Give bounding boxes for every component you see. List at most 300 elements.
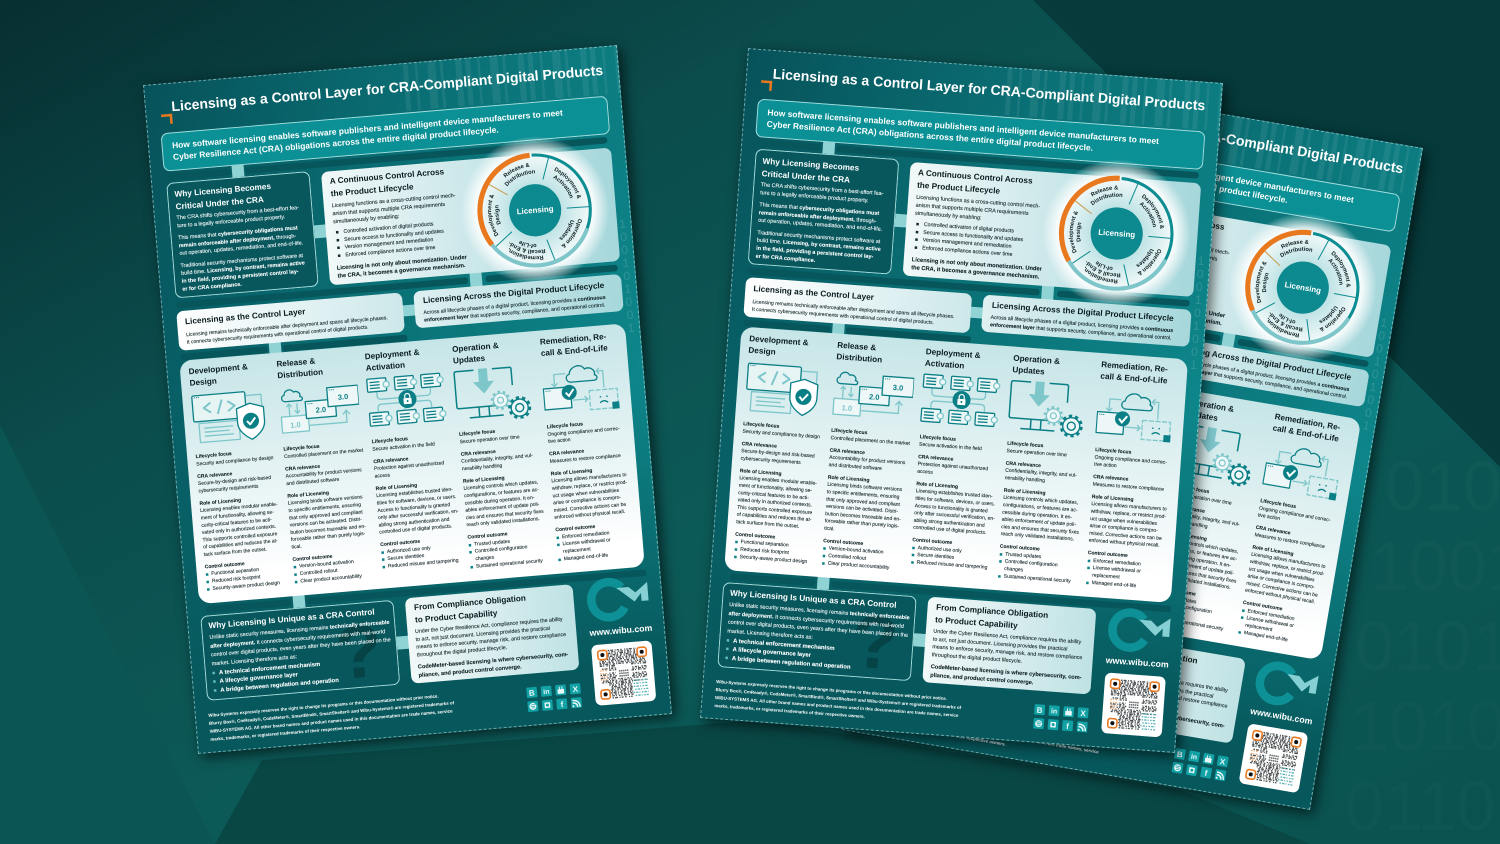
text: operation details: ables enforcement of update poli- bbox=[1002, 517, 1076, 528]
poster: front center: 1 bbox=[1190, 358, 1197, 372]
text: release details: Controlled rollout bbox=[828, 553, 866, 561]
text: deployment details: controlled use of digital products. bbox=[913, 525, 986, 536]
heading: remediation: Remediation, Re- bbox=[1101, 360, 1168, 374]
text: release details: forceable rather than purely logis- bbox=[824, 518, 899, 529]
heading: control layer: Licensing as the Control Layer bbox=[753, 284, 874, 302]
chart: lifecycle ring: Activation bbox=[1328, 259, 1342, 285]
text: deployment details: Authorized use only bbox=[387, 545, 431, 554]
heading: licensing across lifecycle: Licensing Across the Digital Product Lifecycle bbox=[992, 301, 1174, 323]
text: continuous control: anism that supports multiple CRA requirements bbox=[915, 202, 1029, 216]
heading: remediation: Remediation, Re- bbox=[540, 332, 607, 347]
text: deployment details: Control outcome bbox=[380, 539, 420, 548]
heading: control layer: Licensing as the Control Layer bbox=[185, 307, 306, 326]
corner accent bbox=[761, 80, 772, 91]
text: licensing across lifecycle: enforcement layer that supports security, compliance, and operational control. bbox=[1168, 364, 1348, 400]
text: deployment details: access bbox=[917, 469, 933, 475]
text: deployment details: access bbox=[374, 472, 390, 479]
text: closing statement bbox=[337, 253, 468, 280]
subtitle banner: How software licensing enables software publishers and intelligent device manufacturers to meet bbox=[767, 108, 1159, 146]
text: closing statement: Licensing is not only about monetization. Under bbox=[337, 254, 467, 271]
text: continuous control: Licensing functions as a cross-cutting control mech- bbox=[332, 192, 456, 209]
text: continuous control: anism that supports multiple CRA requirements bbox=[332, 201, 445, 217]
poster: front left: 0 bbox=[626, 308, 634, 322]
text: remediation details bbox=[547, 417, 642, 569]
text: deployment details: abling strong authentication and bbox=[914, 517, 985, 528]
text: operation details: Sustained operational security bbox=[1157, 615, 1224, 632]
chart: lifecycle ring: Remediation, bbox=[1084, 266, 1118, 284]
text: licensing across lifecycle: Across all lifecycle phases of a digital product, licensing provides a continuous bbox=[423, 295, 606, 316]
qr code bbox=[1239, 723, 1308, 793]
heading: compliance to capability bbox=[935, 601, 1049, 634]
social media icons: X bbox=[1219, 757, 1227, 767]
heading: why unique: Why Licensing Is Unique as a CRA Control bbox=[208, 607, 375, 630]
text: operation details: changes bbox=[1004, 566, 1023, 573]
heading: why critical bbox=[761, 157, 859, 184]
subtitle banner: How software licensing enables software publishers and intelligent device manufacturers to meet bbox=[967, 129, 1355, 205]
poster: front left: 0 bbox=[620, 230, 627, 244]
text: remediation details: Lifecycle focus bbox=[1260, 498, 1296, 510]
chart: lifecycle ring: Licensing bbox=[1098, 228, 1136, 239]
text: release details: Version-bound activation bbox=[299, 559, 354, 569]
text: compliance to capability: means to enforce security, manage risk, and restore compliance bbox=[1079, 678, 1228, 710]
text: release details: Clear product accountability bbox=[828, 560, 890, 570]
text: operation details: cies and ensures that security fixes bbox=[466, 509, 544, 521]
heading: continuous control: A Continuous Control Across bbox=[918, 168, 1033, 186]
icon: monitor with update arrow and gears bbox=[1195, 426, 1250, 486]
text: why critical: ture to a legally enforceable product property. bbox=[177, 214, 285, 229]
subtitle banner: Cyber Resilience Act (CRA) obligations across the entire digital product lifecycle. bbox=[173, 125, 499, 162]
text: release details: that only approved and compliant bbox=[826, 496, 900, 507]
chart: lifecycle ring: Licensing bbox=[516, 204, 554, 216]
text: release details: and distributed software bbox=[286, 477, 340, 487]
heading: development bbox=[188, 361, 249, 389]
text: remediation details: mised. Corrective actions can be bbox=[1246, 580, 1318, 598]
chart: lifecycle ring: of-Life bbox=[519, 240, 536, 248]
text: release details: tical. bbox=[824, 526, 835, 532]
social media icons: X bbox=[1080, 709, 1087, 718]
text: deployment details: Role of Licensing bbox=[916, 481, 958, 490]
text: release details: Accountability for product versions bbox=[285, 467, 362, 479]
text: continuous control: Licensing functions as a cross-cutting control mech- bbox=[1107, 229, 1230, 256]
text: remediation details bbox=[1085, 447, 1179, 598]
text: release details: Role of Licensing bbox=[287, 490, 329, 499]
icon: monitor with update arrow and gears bbox=[1007, 377, 1091, 438]
text: release details: bution becomes traceable and en- bbox=[825, 511, 901, 522]
text: operation details: nerability handling bbox=[1005, 475, 1045, 483]
text: continuous control: simultaneously by enabling: bbox=[1104, 245, 1171, 262]
text: development details: Security and compliance by design bbox=[742, 428, 820, 440]
poster: front left: 0 bbox=[625, 295, 633, 309]
social media icons: B bbox=[1176, 750, 1184, 760]
text: remediation details: License withdrawal or bbox=[1246, 615, 1294, 629]
chart: lifecycle ring: Recall & End- bbox=[509, 242, 546, 254]
chart: lifecycle ring: of-Life bbox=[1096, 261, 1113, 270]
text: remediation details: arise or compliance is compro- bbox=[1090, 523, 1158, 534]
text: why critical: ture to a legally enforceable product property. bbox=[760, 190, 869, 203]
text: operation details: reach only validated installations. bbox=[1000, 531, 1074, 542]
heading: operation: Updates bbox=[1012, 365, 1045, 376]
icon: versioned windows with cloud: 1.0 bbox=[841, 403, 852, 413]
subtitle banner: Cyber Resilience Act (CRA) obligations across the entire digital product lifecycle. bbox=[965, 141, 1288, 205]
text: development details: tack surface from the outset. bbox=[203, 547, 267, 557]
heading: release bbox=[836, 341, 882, 364]
chart: lifecycle ring bbox=[1046, 160, 1189, 306]
heading: operation: Operation & bbox=[1013, 354, 1060, 366]
chart: lifecycle ring: Recall & End- bbox=[1269, 312, 1302, 332]
text: operation details: Lifecycle focus bbox=[459, 429, 495, 437]
chart: lifecycle ring: Updates bbox=[1136, 249, 1154, 267]
footer legal text: Wibu-Systems expressly reserves the right to change its programs or this documentation without prior notice. bbox=[861, 693, 1089, 737]
text: remediation details: Control outcome bbox=[1088, 550, 1128, 559]
text: operation details: Secure operation over time bbox=[459, 434, 520, 445]
social media icons: X bbox=[572, 685, 579, 694]
heading: compliance to capability: to Product Capability bbox=[415, 608, 498, 624]
text: remediation details: Ongoing compliance and correc- bbox=[1259, 505, 1331, 523]
text: remediation details: Enforced remediation bbox=[562, 530, 610, 540]
text: release details: CRA relevance bbox=[285, 463, 320, 472]
footer legal text: WIBU-SYSTEMS AG. All other brand names and product names used in this documentation are trade names, service bbox=[859, 709, 1099, 754]
text: remediation details: Licensing allows manufacturers to bbox=[1251, 552, 1326, 570]
text: deployment details: Secure activation in the field bbox=[919, 441, 982, 452]
social media icons: in bbox=[1190, 754, 1198, 762]
text: compliance to capability: Under the Cyber Resilience Act, compliance requires the ability bbox=[1082, 663, 1228, 694]
text: operation details: configurations, or features are ac- bbox=[1163, 544, 1237, 562]
social media icons bbox=[1033, 704, 1090, 733]
heading: development: Design bbox=[748, 345, 776, 356]
text: deployment details: tities for software, devices, or users. bbox=[377, 494, 457, 506]
chart: lifecycle ring: Release & bbox=[1090, 186, 1118, 196]
icon: question mark watermark: ? bbox=[849, 598, 901, 686]
heading: remediation: call & End-of-Life bbox=[1272, 423, 1340, 443]
text: release details: Controlled placement on the market bbox=[284, 447, 363, 459]
text: remediation details: Control outcome bbox=[1243, 600, 1283, 612]
footer legal text: WIBU-SYSTEMS AG. All other brand names and product names used in this documentation are trade names, service bbox=[715, 695, 959, 718]
text: development details: tack surface from the outset. bbox=[736, 519, 799, 529]
heading: release: Distribution bbox=[277, 367, 323, 380]
text: why critical: Traditional security mechanisms protect software at bbox=[757, 229, 880, 244]
chart: lifecycle ring: Remediation, bbox=[1268, 318, 1299, 338]
text: codemeter statement: CodeMeter-based licensing is where cybersecurity, com- bbox=[418, 651, 569, 670]
poster: front center: 1 bbox=[1197, 254, 1205, 268]
text: compliance to capability: throughout the digital product lifecycle. bbox=[417, 645, 507, 658]
heading: why critical: Why Licensing Becomes bbox=[174, 182, 271, 199]
heading: development bbox=[748, 334, 809, 356]
list: enabled controls: Secure access to functionality and updates bbox=[923, 229, 1023, 243]
text: deployment details: Control outcome bbox=[912, 537, 952, 546]
heading: operation: Updates bbox=[453, 354, 485, 365]
text: why critical: remain enforceable after deployment, through- bbox=[179, 233, 296, 249]
chart: lifecycle ring: Design bbox=[494, 205, 501, 225]
text: operation details: Controlled configuration bbox=[1005, 559, 1058, 568]
text: why unique bbox=[727, 601, 910, 649]
text: operation details: Controlled configuration bbox=[475, 544, 528, 554]
text: development details: Security-aware product design bbox=[740, 554, 807, 564]
heading: why critical: Critical Under the CRA bbox=[175, 195, 264, 211]
text: development details: Secure-by-design and risk-based bbox=[741, 448, 815, 459]
text: remediation details: replacement bbox=[1245, 623, 1273, 633]
poster: back right: 0 bbox=[1371, 367, 1379, 382]
footer legal text: marks, trademarks, or registered trademarks of their respective owners. bbox=[210, 724, 361, 742]
text: development details: cybersecurity requirements bbox=[741, 456, 801, 465]
text: operation details: Role of Licensing bbox=[1165, 530, 1207, 542]
text: remediation details: Control outcome bbox=[555, 524, 596, 533]
text: remediation details: replacement bbox=[563, 546, 591, 554]
chart: lifecycle ring: Operation & bbox=[1137, 249, 1162, 276]
chart: lifecycle ring: Release & bbox=[1280, 240, 1308, 249]
text: operation details: configurations, or features are ac- bbox=[1003, 502, 1078, 513]
text: remediation details: CRA relevance bbox=[1255, 525, 1291, 536]
poster: front left: 1 bbox=[619, 217, 626, 231]
column: deployment and activation bbox=[909, 345, 1010, 586]
text: release details bbox=[821, 427, 915, 578]
text: deployment details: CRA relevance bbox=[918, 454, 954, 462]
text: operation details: Licensing controls which updates, bbox=[1164, 537, 1239, 555]
text: remediation details: CRA relevance bbox=[549, 449, 584, 457]
poster: front left: 1 bbox=[627, 321, 635, 335]
qr code bbox=[1101, 672, 1166, 737]
panel: why licensing becomes critical bbox=[166, 171, 319, 298]
text: release details: Control outcome bbox=[823, 538, 863, 546]
text: deployment details: Secure identities bbox=[917, 552, 954, 561]
poster: front left: 1 bbox=[622, 256, 630, 270]
text: release details: to specific entitlements, ensuring bbox=[288, 502, 361, 514]
panel: licensing across lifecycle bbox=[981, 295, 1192, 347]
text: why critical: out operation, updates, remediation, and end-of-life. bbox=[179, 240, 303, 257]
text: compliance to capability: throughout the digital product lifecycle. bbox=[932, 652, 1022, 664]
text: remediation details: enforced without physical recall. bbox=[1245, 588, 1315, 605]
list: enabled controls: Version management and remediation bbox=[923, 237, 1012, 250]
text: why critical: remain enforceable after deployment, through- bbox=[759, 209, 877, 224]
panel: compliance to capability bbox=[1066, 631, 1246, 744]
list: licensing roles: A lifecycle governance layer bbox=[219, 671, 298, 684]
text: operation details: Trusted updates bbox=[1005, 551, 1041, 560]
text: why unique: after deployment. It connects cybersecurity requirements with real-world bbox=[728, 610, 904, 629]
heading: continuous control: the Product Lifecycle bbox=[1109, 216, 1192, 239]
column: development and design bbox=[188, 358, 291, 600]
text: operation details: reach only validated installations. bbox=[466, 516, 540, 528]
column: release and distribution bbox=[822, 341, 914, 570]
text: deployment details: Reduced misuse and tampering bbox=[917, 560, 988, 570]
text: release details: versions can be activated. Distri- bbox=[826, 504, 898, 514]
text: why unique bbox=[209, 618, 392, 668]
text: development details: Reduced risk footprint bbox=[212, 574, 261, 584]
text: why unique: market. Licensing therefore acts as: bbox=[211, 653, 297, 667]
text: remediation details: tive action bbox=[1257, 512, 1281, 522]
text: compliance to capability bbox=[1078, 663, 1228, 710]
text: closing statement: Licensing is not only about monetization. Under bbox=[1096, 291, 1226, 319]
list: enabled controls: Secure access to functionality and updates bbox=[344, 228, 444, 242]
icon: question mark watermark: ? bbox=[333, 608, 386, 695]
text: remediation details: License withdrawal or bbox=[1093, 565, 1141, 574]
qr code bbox=[591, 640, 656, 706]
text: deployment details: Access to functionality is granted bbox=[915, 503, 988, 514]
text: operation details: Trusted updates bbox=[1160, 593, 1197, 605]
icon: cloud, windows and arrows bbox=[1262, 448, 1338, 501]
text: control layer: Licensing remains technically enforceable after deployment and spans all lifecycle phases. bbox=[186, 315, 388, 338]
text: codemeter statement bbox=[418, 650, 569, 680]
chart: lifecycle ring: Distribution bbox=[1280, 246, 1312, 258]
heading: continuous control: A Continuous Control Across bbox=[329, 167, 444, 186]
text: remediation details bbox=[1238, 498, 1331, 643]
panel: compliance to capability bbox=[405, 584, 579, 684]
text: development details: This supports controlled exposure bbox=[737, 504, 812, 516]
social media icons: f bbox=[1204, 769, 1208, 778]
text: closing statement: Licensing is not only about monetization. Under bbox=[912, 257, 1042, 272]
logo: CM mark bbox=[1256, 662, 1319, 706]
text: release details: tical. bbox=[291, 544, 302, 550]
footer legal text: marks, trademarks, or registered trademarks of their respective owners. bbox=[857, 716, 1006, 747]
column: operation and updates bbox=[1156, 397, 1250, 632]
text: operation details: nerability handling bbox=[1167, 517, 1208, 529]
text: licensing across lifecycle: enforcement layer that supports security, compliance, and operational control. bbox=[990, 322, 1172, 341]
panel: continuous control bbox=[1086, 197, 1392, 358]
text: why unique: Unlike static security measures, licensing remains technically enforceable bbox=[729, 602, 910, 621]
heading: remediation: call & End-of-Life bbox=[540, 343, 608, 358]
text: development details: curity-critical features to be acti- bbox=[201, 517, 272, 528]
social media icons: f bbox=[1066, 722, 1070, 731]
social media icons bbox=[1172, 748, 1229, 781]
heading: compliance to capability: From Compliance Obligation bbox=[414, 594, 526, 612]
panel: lifecycle phases bbox=[880, 344, 1361, 660]
heading: development: Development & bbox=[749, 334, 809, 347]
chart: lifecycle ring: Remediation, bbox=[508, 248, 544, 260]
text: operation details: Licensing controls which updates, bbox=[463, 480, 538, 491]
chart: lifecycle ring: Development & bbox=[1254, 262, 1267, 304]
text: remediation details: arise or compliance is compro- bbox=[1247, 573, 1315, 590]
column: development and design bbox=[734, 334, 820, 564]
list: licensing roles: A lifecycle governance layer bbox=[732, 646, 811, 658]
heading: development: Design bbox=[189, 376, 217, 387]
text: closing statement: the CRA, it becomes a governance mechanism. bbox=[1095, 299, 1222, 327]
text: remediation details: Enforced remediation bbox=[1093, 558, 1141, 567]
social media icons bbox=[526, 683, 583, 713]
text: release details: that only approved and compliant bbox=[289, 509, 363, 521]
heading: compliance to capability: From Compliance Obligation bbox=[1086, 638, 1198, 666]
text: control layer: Licensing remains technically enforceable after deployment and spans all lifecycle phases. bbox=[752, 299, 955, 320]
text: why critical bbox=[176, 204, 307, 298]
text: development details: of capabilities and reduces the at- bbox=[736, 512, 812, 523]
poster: front center: 1 bbox=[1193, 319, 1200, 333]
chart: lifecycle ring: Design bbox=[1262, 273, 1269, 292]
text: remediation details: Managed end-of-life bbox=[564, 552, 608, 562]
title: Licensing as a Control Layer for CRA-Compliant Digital Products bbox=[976, 88, 1405, 176]
footer legal text: marks, trademarks, or registered trademarks of their respective owners. bbox=[714, 703, 865, 719]
text: operation details: cessible during operation. It en- bbox=[1002, 509, 1072, 520]
list: enabled controls: Enforced compliance actions over time bbox=[922, 245, 1013, 258]
icon: code window with shield bbox=[746, 362, 818, 416]
icon: versioned windows with cloud: 3.0 bbox=[893, 383, 904, 393]
text: development details: Reduced risk footprint bbox=[740, 547, 789, 556]
heading: continuous control bbox=[329, 166, 446, 200]
text: development details: curity-critical features to be acti- bbox=[738, 490, 809, 501]
heading: remediation: call & End-of-Life bbox=[1100, 371, 1168, 385]
text: why critical: The CRA shifts cybersecurity from a best-effort fea- bbox=[176, 205, 299, 221]
text: compliance to capability: means to enforce security, manage risk, and restore compliance bbox=[932, 644, 1083, 661]
poster: front left: 0 bbox=[623, 269, 631, 283]
icon: versioned windows with cloud bbox=[277, 377, 361, 439]
chart: lifecycle ring: Operation & bbox=[561, 219, 582, 248]
text: operation details: Confidentiality, integrity, and vul- bbox=[1005, 468, 1077, 478]
text: operation details: CRA relevance bbox=[1170, 503, 1205, 514]
list: enabled controls bbox=[336, 220, 445, 260]
text: operation details bbox=[1156, 483, 1240, 632]
footer legal text: Wibu-Systems expressly reserves the right to change its programs or this documentation without prior notice. bbox=[208, 693, 439, 718]
text: development details: vated only in authorized contexts. bbox=[202, 524, 276, 536]
corner accent bbox=[161, 114, 173, 125]
text: operation details: ables enforcement of update poli- bbox=[465, 502, 540, 513]
text: control layer: It connects cybersecurity requirements with operational control of digital products. bbox=[187, 324, 369, 345]
poster: back right: 0 bbox=[1364, 406, 1373, 420]
text: deployment details: Lifecycle focus bbox=[919, 434, 956, 442]
heading: development: Development & bbox=[188, 362, 248, 376]
website url: www.wibu.com bbox=[1250, 706, 1313, 726]
text: deployment details: Access to functionality is granted bbox=[377, 502, 450, 513]
text: release details: to specific entitlements, ensuring bbox=[827, 489, 900, 500]
text: development details: Security-aware product design bbox=[212, 580, 280, 591]
poster: front center: 0 bbox=[1193, 306, 1201, 320]
text: remediation details: withdraw, replace, or restrict prod- bbox=[1091, 509, 1166, 520]
text: why unique: market. Licensing therefore acts as: bbox=[727, 628, 813, 640]
text: why critical: This means that cybersecurity obligations must bbox=[178, 225, 298, 241]
text: continuous control: anism that supports multiple CRA requirements bbox=[1106, 237, 1218, 262]
heading: compliance to capability: to Product Capability bbox=[935, 615, 1018, 630]
heading: licensing across lifecycle: Licensing Across the Digital Product Lifecycle bbox=[1171, 343, 1352, 382]
poster: front center: 1 bbox=[1194, 293, 1202, 307]
text: development details: CRA relevance bbox=[197, 471, 233, 479]
text: control layer: It connects cybersecurity requirements with operational control of digital products. bbox=[752, 307, 934, 326]
text: deployment details: Role of Licensing bbox=[375, 483, 417, 492]
text: why unique: control over digital products, even years after they have been placed on the bbox=[211, 637, 391, 658]
text: codemeter statement: pliance, and product control converge. bbox=[418, 664, 522, 678]
text: operation details: Secure operation over time bbox=[1006, 448, 1067, 458]
poster: front center: 0 bbox=[1192, 332, 1199, 346]
text: operation details: Control outcome bbox=[1000, 544, 1040, 552]
heading: remediation bbox=[1100, 359, 1169, 386]
text: closing statement: the CRA, it becomes a governance mechanism. bbox=[337, 262, 466, 279]
social media icons: B bbox=[1036, 706, 1043, 715]
text: continuous control: Licensing functions as a cross-cutting control mech- bbox=[916, 194, 1040, 209]
text: release details: Lifecycle focus bbox=[283, 444, 320, 452]
website url: www.wibu.com bbox=[1105, 655, 1169, 670]
text: why critical: Traditional security mechanisms protect software at bbox=[180, 252, 303, 269]
text: remediation details: Lifecycle focus bbox=[1095, 447, 1132, 455]
icon: versioned windows with cloud bbox=[831, 365, 915, 425]
text: operation details: nerability handling bbox=[462, 463, 502, 472]
heading: remediation: Remediation, Re- bbox=[1274, 412, 1341, 432]
text: operation details: Confidentiality, integrity, and vul- bbox=[1169, 510, 1240, 527]
text: remediation details: Role of Licensing bbox=[1252, 544, 1294, 557]
title: Licensing as a Control Layer for CRA-Compliant Digital Products bbox=[171, 62, 604, 114]
poster: back right: 1 bbox=[1362, 419, 1371, 433]
text: development details: Role of Licensing bbox=[740, 468, 782, 477]
text: release details: Controlled rollout bbox=[300, 568, 338, 577]
heading: continuous control: the Product Lifecycle bbox=[917, 180, 1000, 195]
text: why critical: The CRA shifts cybersecurity from a best-effort fea- bbox=[761, 182, 884, 197]
chart: lifecycle ring: Design bbox=[1076, 222, 1082, 242]
text: deployment details: CRA relevance bbox=[373, 456, 409, 464]
text: remediation details: withdraw, replace, or restrict prod- bbox=[1250, 559, 1325, 577]
heading: operation bbox=[1185, 397, 1235, 423]
panel: licensing across lifecycle bbox=[413, 274, 624, 328]
heading: deployment: Activation bbox=[365, 360, 405, 373]
text: remediation details: mised. Corrective actions can be bbox=[554, 502, 626, 513]
column: remediation bbox=[539, 329, 643, 570]
text: development details: Secure-by-design and risk-based bbox=[198, 475, 271, 487]
heading: continuous control bbox=[917, 168, 1033, 195]
text: licensing across lifecycle bbox=[423, 294, 607, 324]
subtitle banner bbox=[755, 98, 1205, 170]
text: remediation details: uct usage when vulnerabilities bbox=[552, 487, 619, 499]
